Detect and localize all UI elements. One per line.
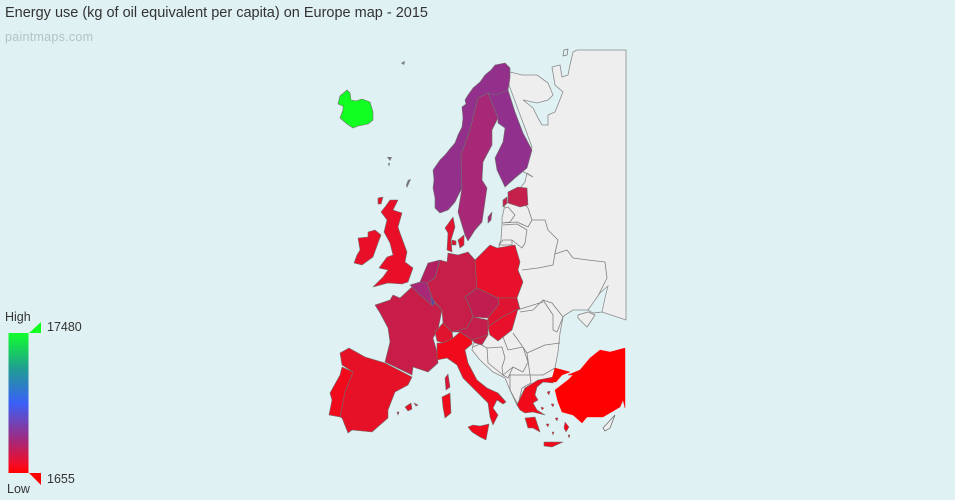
island: Sardinia xyxy=(442,393,451,418)
islands: Balearics xyxy=(397,403,418,415)
country: Turkey xyxy=(551,348,625,423)
country: Finland xyxy=(488,90,532,187)
country: Czech Republic xyxy=(465,288,499,318)
country: Slovakia xyxy=(488,298,520,327)
country: Germany xyxy=(427,252,477,332)
map of Europe xyxy=(329,49,626,447)
legend low marker xyxy=(29,473,41,485)
legend label: Low: Low xyxy=(7,482,31,496)
country: Luxembourg xyxy=(431,297,434,305)
country: Portugal xyxy=(329,367,353,417)
Azov Sea xyxy=(588,286,608,313)
legend gradient bar xyxy=(8,333,28,473)
country: Sweden xyxy=(458,93,498,241)
country: Netherlands xyxy=(420,260,440,283)
country: Slovenia xyxy=(472,335,488,345)
country: Poland xyxy=(475,245,523,298)
country: Belgium xyxy=(410,282,433,305)
country: Hungary xyxy=(488,309,518,341)
country: Ireland xyxy=(354,230,381,265)
country: Iceland xyxy=(338,90,373,128)
Greek islands xyxy=(541,391,570,438)
country: Spain xyxy=(340,348,412,433)
country: Denmark xyxy=(445,217,464,252)
island: Corsica xyxy=(445,374,450,390)
country: Switzerland xyxy=(435,323,453,343)
legend value: 1655: 1655 xyxy=(47,472,75,486)
Cyprus xyxy=(603,415,615,431)
legend high marker xyxy=(29,322,41,333)
country: France xyxy=(375,287,442,375)
country: Estonia xyxy=(503,187,528,207)
legend xyxy=(5,310,82,496)
legend label: High: High xyxy=(5,310,31,324)
no-data land: eastern Europe and Russia xyxy=(472,49,626,431)
title: Energy use (kg of oil equivalent per capita) on Europe map - 2015 xyxy=(5,5,428,21)
Crimea xyxy=(578,312,595,327)
country: Austria xyxy=(452,317,488,340)
country: Italy xyxy=(437,332,506,425)
country: Greece xyxy=(517,377,563,447)
country: Norway xyxy=(433,63,510,213)
island: Sicily xyxy=(468,424,489,440)
country: United Kingdom xyxy=(373,197,413,287)
watermark: paintmaps.com: paintmaps.com xyxy=(5,30,93,44)
legend value: 17480: 17480 xyxy=(47,320,82,334)
small northern islands xyxy=(387,61,411,188)
